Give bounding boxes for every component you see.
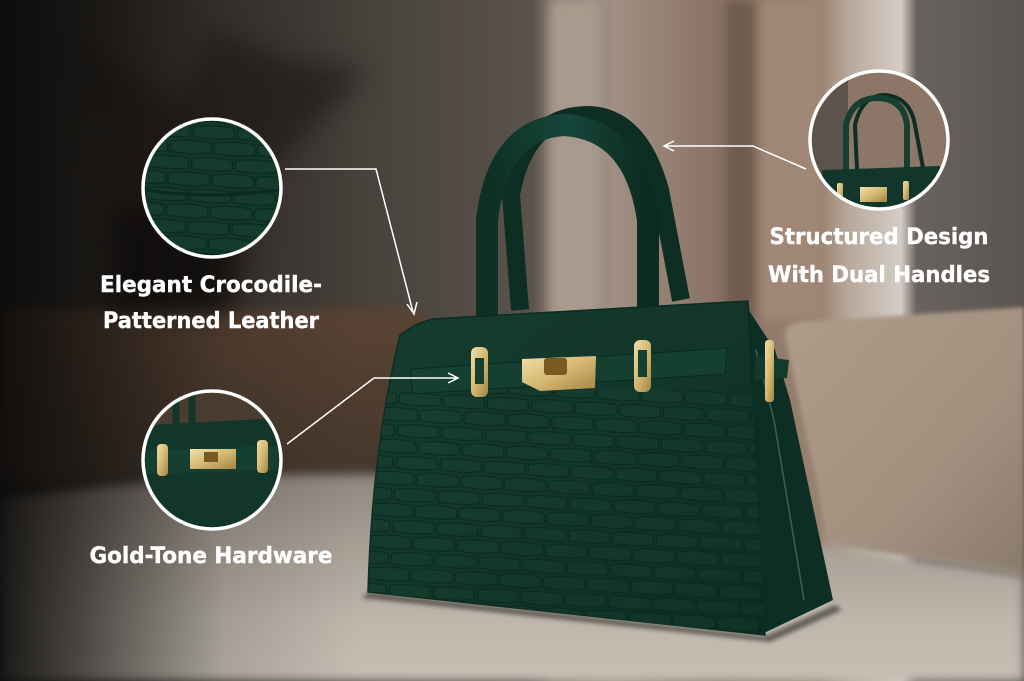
handbag: [360, 115, 842, 642]
circle: dual handles detail: [808, 70, 952, 212]
croc texture: [370, 390, 734, 600]
circle: gold hardware detail: [140, 390, 284, 534]
arrow head leather: [407, 302, 417, 314]
hardware: left loop: [471, 347, 488, 397]
arrow head handles: [664, 141, 674, 151]
side gusset: [744, 303, 833, 635]
arrow: leather: [285, 169, 413, 312]
hardware: right loop: [634, 340, 651, 392]
callout arrows: [285, 141, 806, 444]
hardware: turn lock: [522, 356, 596, 391]
label: leather: Elegant Crocodile-: [100, 273, 322, 298]
arrow head hardware: [448, 373, 458, 383]
arrow: handles: [665, 146, 806, 169]
label: hardware: Gold-Tone Hardware: [90, 544, 332, 569]
hardware: side clasp: [765, 340, 774, 402]
label: leather line 2: Patterned Leather: [103, 309, 319, 334]
label: handles: Structured Design: [770, 225, 988, 250]
arrow: hardware: [287, 378, 456, 444]
front handle: [487, 125, 648, 335]
back handle: [511, 115, 681, 310]
strap: [411, 348, 727, 394]
bag shadow: [362, 592, 842, 642]
circle: crocodile leather detail: [140, 116, 284, 260]
label: handles line 2: With Dual Handles: [768, 263, 990, 288]
bag body: [368, 301, 765, 635]
